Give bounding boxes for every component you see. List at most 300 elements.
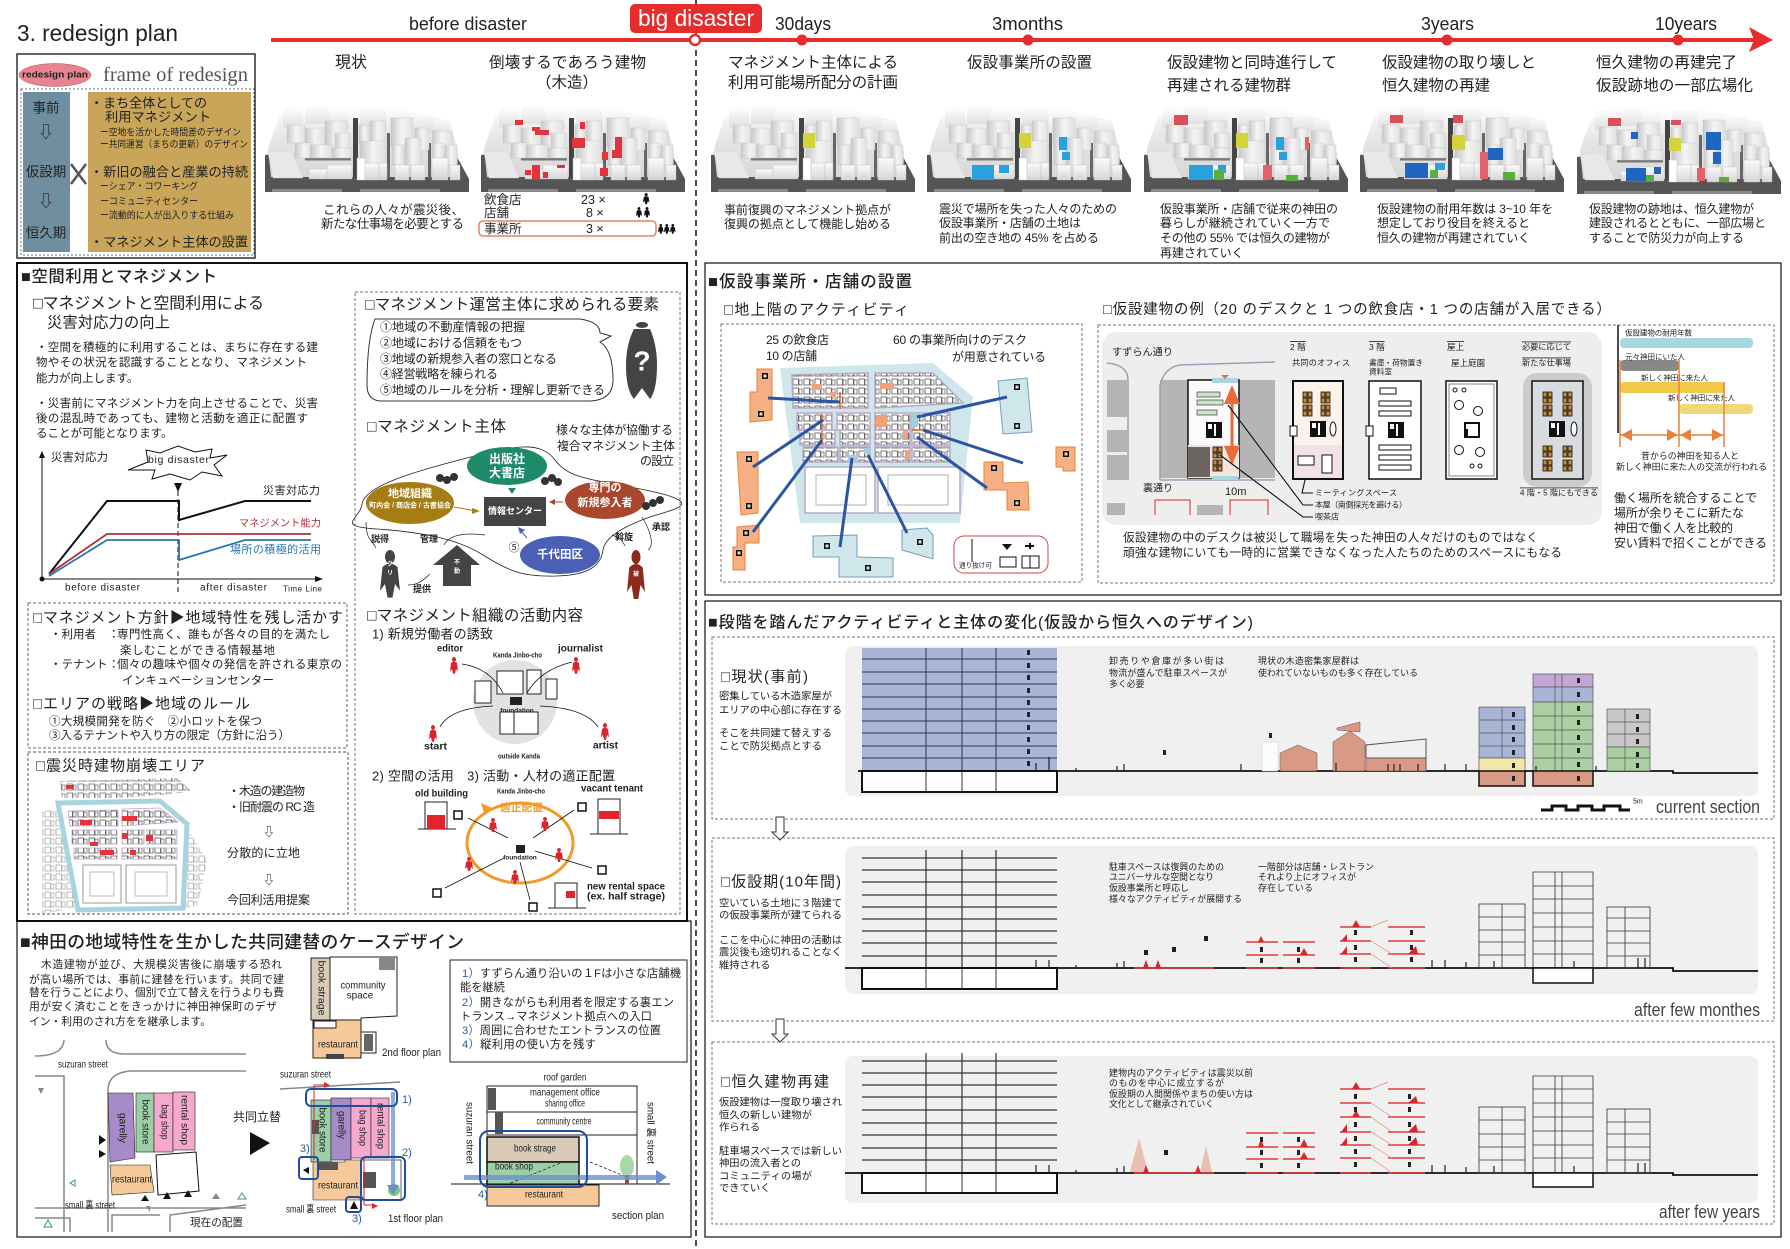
diagram: management body: 提供 — [413, 583, 431, 594]
diagram: attracting workers: journalist — [557, 644, 604, 654]
section: temporary: 仮設事業所と呼応し — [1109, 882, 1189, 893]
plan: 2F office — [1290, 342, 1350, 479]
disaster response text: 後の混乱時であっても、建物と活動を適正に配置す — [36, 411, 308, 425]
panel: frame of redesign: ー共同運営（まちの更新）のデザイン — [100, 138, 248, 150]
diagram: management body: 新規参入者 — [578, 495, 632, 509]
temporary building examples box: 20m — [1162, 421, 1183, 433]
heading: ■空間利用とマネジメント — [21, 268, 217, 286]
speech bubble: ⑤地域のルールを分析・理解し更新できる — [380, 383, 605, 397]
disaster response text: 災害対応力の向上 — [47, 314, 170, 332]
plan: present layout: small 裏 street — [65, 1198, 115, 1212]
management policy box: ・テナント — [50, 658, 108, 671]
3D city: 3 months — [927, 106, 1131, 192]
management policy box: □マネジメント方針▶地域特性を残し活かす — [33, 610, 343, 626]
plan: 1st floor: 3) — [300, 1143, 310, 1155]
diagram: management body: 承認 — [652, 521, 670, 532]
headings above 3D city panels: 倒壊するであろう建物 — [489, 54, 646, 72]
plan: present layout — [35, 1040, 246, 1232]
text: integrating workplaces: 働く場所を統合することで — [1614, 491, 1757, 505]
collapse area box — [28, 752, 348, 914]
plan: site: 本屋（南側採光を避ける） — [1315, 500, 1407, 510]
panel: frame of redesign: ・マネジメント主体の設置 — [90, 234, 248, 250]
section: temporary: 震災後も途切れることなく — [719, 946, 842, 958]
panel: space use and management — [17, 263, 687, 921]
management policy box: □エリアの戦略▶地域のルール — [33, 696, 250, 712]
panel: frame of redesign: ーコミュニティセンター — [100, 196, 198, 208]
texts below city panels: 建設されるとともに、一部広場と — [1589, 216, 1766, 230]
disaster response text: ・災害前にマネジメント力を向上させることで、災害 — [36, 396, 318, 410]
headings above 3D city panels: 仮設事業所の設置 — [967, 54, 1092, 72]
section: temporary: 空いている土地に３階建て — [719, 896, 842, 910]
management policy box: 楽しむことができる情報基地 — [120, 643, 276, 657]
temporary building examples box: 10m — [1225, 486, 1246, 498]
figure: creator: ク — [387, 560, 393, 568]
panel: frame of redesign: ⇩ — [38, 192, 54, 210]
section: permanent: コミュニティの場が — [719, 1170, 813, 1182]
diagram: management body: ⑤ — [508, 541, 520, 554]
diagram: attracting workers: outside Kanda — [498, 754, 540, 760]
section plan: restaurant — [525, 1190, 563, 1200]
section: temporary: それより上にオフィスが — [1258, 871, 1356, 882]
chart: temporary building lifespan — [1616, 325, 1767, 472]
disaster response text: ることが可能となります。 — [36, 426, 173, 440]
text: integrating workplaces: 神田で働く人を比較的 — [1614, 520, 1733, 535]
panel: case design of joint rebuilding — [17, 921, 691, 1237]
plan: present layout: 現在の配置 — [190, 1217, 243, 1229]
plan: 2nd floor: space — [347, 990, 374, 1002]
plan: rooftop garden: 屋上 — [1447, 342, 1465, 352]
diagram: management body: 説得 — [371, 533, 389, 544]
section: temporary: □仮設期(10年間) — [721, 874, 841, 890]
chart: disaster response capacity: 災害対応力 — [263, 484, 320, 497]
legend: 通り抜け可 — [959, 560, 992, 570]
panel: frame of redesign: ーシェア・コワーキング — [100, 180, 198, 192]
section plan: suzuran street — [464, 1102, 474, 1164]
ground floor activity box: が用意されている — [952, 349, 1046, 364]
headings above 3D city panels: 再建される建物群 — [1167, 76, 1291, 94]
text: explanation: 用が安く済むことをきっかけに神田神保町のデザ — [29, 999, 277, 1013]
collapse area box: ⇩ — [263, 873, 275, 887]
collapse area box: ⇩ — [263, 825, 275, 839]
plan: 2nd floor — [311, 957, 441, 1059]
ground floor activity box: 60 の事業所向けのデスク — [893, 332, 1027, 347]
plan: new workplaces: 4 階・5 階にもできる — [1520, 488, 1598, 498]
plan: 1st floor: 2) — [402, 1147, 412, 1159]
management policy box: ： — [108, 629, 120, 641]
chart: disaster response capacity: before disaster — [65, 582, 141, 594]
headings above 3D city panels: 仮設建物と同時進行して — [1167, 54, 1337, 72]
section: permanent: after few years — [1659, 1202, 1760, 1222]
section: permanent: 神田の流入者との — [719, 1156, 801, 1170]
table: damaged businesses: 23 × — [581, 193, 606, 207]
right column box: の設立 — [640, 454, 674, 468]
text: desks not only for: 頑強な建物にいても一時的に営業できなくなった人たちのためのスペースにもなる — [1123, 546, 1562, 560]
section plan: 4) — [478, 1189, 488, 1201]
section: permanent: 文化として継承されていく — [1109, 1098, 1214, 1109]
section: temporary: 一階部分は店舗・レストラン — [1258, 861, 1374, 872]
diagram: appropriate placement: Kanda Jinbo-cho — [497, 788, 545, 796]
section: current: 使われていないものも多く存在している — [1258, 667, 1418, 678]
right column box: □マネジメント運営主体に求められる要素 — [365, 296, 659, 314]
plan: 2nd floor: 2nd floor plan — [382, 1047, 441, 1059]
headings above 3D city panels — [335, 54, 1753, 94]
scale bar: 5m — [1633, 798, 1643, 806]
plan: 2F office: 2 階 — [1290, 342, 1306, 352]
diagram: attracting workers: foundation — [500, 708, 534, 714]
plan: present layout: garelly — [116, 1113, 128, 1143]
diagram: management body: 管理 — [420, 533, 438, 544]
section: temporary: 存在している — [1258, 882, 1313, 893]
3D city: 10 years — [1577, 108, 1781, 194]
plan: present layout: rental shop — [178, 1095, 190, 1145]
section: current: 現状の木造密集家屋群は — [1258, 655, 1359, 666]
plan: 2nd floor: community — [340, 980, 386, 992]
collapse area box: ・旧耐震の RC 造 — [228, 800, 315, 814]
section: current: □現状(事前) — [721, 668, 808, 686]
diagram: management body: 千代田区 — [537, 547, 583, 561]
section: temporary: ここを中心に神田の活動は — [719, 934, 842, 946]
chart: disaster response capacity — [39, 446, 323, 595]
chart: temporary building lifespan: 昔からの神田を知る人と — [1641, 450, 1739, 461]
plan: 1st floor: bag shop — [356, 1110, 368, 1146]
diagram: management body: 出版社 — [489, 451, 525, 466]
section: permanent: □恒久建物再建 — [721, 1074, 829, 1090]
texts below city panels — [724, 201, 1766, 260]
plan: site — [1107, 362, 1407, 522]
plan: 1st floor: 1st floor plan — [388, 1213, 443, 1225]
plan: site: 喫茶店 — [1315, 512, 1339, 522]
text box: design points: 3）周囲に合わせたエントランスの位置 — [462, 1024, 661, 1037]
section: temporary — [712, 838, 1774, 1021]
disaster response text: ・空間を積極的に利用することは、まちに存在する建 — [36, 340, 318, 354]
chart: disaster response capacity: 場所の積極的活用 — [230, 542, 321, 556]
table: damaged businesses: 8 × — [586, 206, 604, 220]
text: explanation — [29, 957, 284, 1028]
section: temporary: ユニバーサルな空間となり — [1109, 872, 1214, 882]
texts below city panels: 暮らしが継続されていく一方で — [1160, 215, 1330, 230]
headings above 3D city panels: （木造） — [536, 74, 598, 92]
section: current: ことで防災拠点とする — [719, 740, 822, 752]
icon: real-estate house: 不 — [454, 559, 460, 566]
chart: disaster response capacity: マネジメント能力 — [239, 516, 321, 530]
legend — [954, 536, 1048, 573]
texts below city panels: 前出の空き地の 45% を占める — [939, 230, 1099, 245]
section: permanent — [712, 1042, 1774, 1224]
section: temporary: after few monthes — [1634, 1000, 1760, 1020]
section: current: 物流が盛んで駐車スペースが — [1109, 667, 1227, 678]
text: integrating workplaces: 場所が余りそこに新たな — [1614, 505, 1744, 520]
icon: real-estate house: 動 — [454, 567, 460, 575]
plan: present layout: book store — [140, 1100, 150, 1145]
texts below city panels: その他の 55% では恒久の建物が — [1160, 230, 1330, 245]
section: temporary: の仮設事業所が建てられる — [719, 908, 842, 922]
disaster response text — [33, 294, 318, 440]
plan: new workplaces — [1520, 342, 1598, 498]
panel: temporary offices and shops: □仮設建物の例（20 のデスクと 1 つの飲食店・1 つの店舗が入居できる） — [1103, 300, 1611, 318]
plan: rooftop garden: 屋上庭園 — [1451, 358, 1485, 368]
texts below city panels: 恒久の建物が再建されていく — [1377, 230, 1530, 245]
texts below city panels: することで防災力が向上する — [1589, 230, 1744, 245]
arrow: to temporary phase — [772, 817, 788, 840]
heading: ■神田の地域特性を生かした共同建替のケースデザイン — [20, 931, 464, 952]
timeline arrow: before disaster — [409, 14, 527, 34]
plan: 3F storage: 資料室 — [1369, 366, 1392, 376]
right column box: 様々な主体が協働する — [556, 422, 673, 437]
texts below city panels: 仮設事業所・店舗の土地は — [939, 216, 1081, 230]
section plan: sharing office — [545, 1098, 585, 1110]
text box: design points: トランス→マネジメント拠点への入口 — [460, 1009, 652, 1023]
diagram: management body: 情報センター — [488, 505, 542, 516]
table: damaged businesses: 飲食店 — [484, 192, 522, 207]
plan: present layout: restaurant — [112, 1174, 152, 1186]
text: explanation: 木造建物が並び、大規模災害後に崩壊する恐れ — [41, 957, 282, 971]
diagram: appropriate placement: vacant tenant — [581, 784, 644, 794]
title: 3. redesign plan — [17, 20, 178, 46]
section plan — [451, 1072, 670, 1222]
figure: creator — [380, 550, 400, 598]
diagram: appropriate placement: (ex. half strage) — [587, 892, 665, 902]
management policy box: 専門性高く、誰もが各々の目的を満たし — [117, 627, 330, 641]
3D city: collapsing wooden buildings — [481, 106, 685, 192]
panel: frame of redesign: ー空地を活かした時間差のデザイン — [100, 126, 241, 138]
diagram: attracting workers: artist — [593, 740, 619, 752]
plan: site: ミーティングスペース — [1315, 488, 1397, 498]
panel: frame of redesign: 恒久期 — [26, 226, 66, 240]
timeline arrow: 3months — [992, 14, 1063, 34]
diagram: appropriate placement: 適正配置 — [500, 801, 544, 814]
plan: 1st floor: 1) — [402, 1094, 412, 1106]
diagram: management body: 町内会 / 商店会 / 古書協会 — [369, 500, 451, 510]
headings above 3D city panels: 仮設跡地の一部広場化 — [1596, 76, 1753, 94]
panel: frame of redesign: 利用マネジメント — [105, 110, 211, 124]
diagram: management body: 大書店 — [489, 465, 525, 480]
text: explanation: が高い場所では、事前に建替を行います。共同で建 — [29, 972, 284, 986]
blue link lines — [753, 397, 1023, 547]
section: current: エリアの中心部に存在する — [719, 704, 842, 716]
timeline arrow: 30days — [775, 14, 831, 34]
section: temporary: 駐車スペースは復興のための — [1109, 861, 1224, 872]
text box: design points — [450, 960, 687, 1062]
chart: temporary building lifespan: 仮設建物の耐用年数 — [1625, 328, 1692, 338]
texts below city panels: 仮設建物の耐用年数は 3~10 年を — [1377, 201, 1553, 216]
chart: temporary building lifespan: 新しく神田に来た人 — [1641, 372, 1708, 382]
collapse area box: 今回利活用提案 — [227, 892, 310, 907]
plan: 1st floor: book store — [316, 1108, 328, 1153]
section: current — [712, 637, 1774, 819]
plan: 3F storage: 書庫・荷物置き — [1369, 358, 1423, 368]
disaster response text: □マネジメントと空間利用による — [33, 294, 264, 312]
speech bubble: ①地域の不動産情報の把握 — [380, 320, 525, 334]
panel: temporary offices and shops — [705, 263, 1781, 595]
texts below city panels: 仮設建物の跡地は、恒久建物が — [1589, 201, 1754, 216]
headings above 3D city panels: 利用可能場所配分の計画 — [728, 74, 898, 92]
diagram: appropriate placement: old building — [415, 788, 468, 800]
section: current: そこを共同建て替えする — [719, 726, 832, 740]
plan: 3F storage — [1366, 342, 1423, 479]
section: permanent: 駐車場スペースでは新しい — [719, 1144, 842, 1158]
headings above 3D city panels: 恒久建物の再建完了 — [1596, 54, 1737, 72]
chart: temporary building lifespan: 新しく神田に来た人 — [1668, 392, 1736, 402]
big disaster label: big disaster — [638, 5, 754, 31]
right column box: 1) 新規労働者の誘致 — [372, 626, 493, 642]
figure: worker — [627, 550, 645, 599]
plan: present layout: suzuran street — [58, 1060, 108, 1070]
heading: ■仮設事業所・店舗の設置 — [708, 272, 912, 291]
plan: 2nd floor: book strage — [316, 960, 326, 1016]
disaster response text: 物やその状況を認識することとなり、マネジメント — [36, 355, 307, 369]
section: permanent: 仮設建物は一度取り壊され — [719, 1096, 843, 1108]
text box: design points: 4）縦利用の使い方を残す — [462, 1037, 596, 1051]
plan: new workplaces: 必要に応じて — [1522, 342, 1571, 352]
section plan: management office — [530, 1088, 600, 1098]
arrow: joint rebuilding — [233, 1110, 281, 1155]
texts below city panels: 想定しており役目を終えると — [1377, 215, 1530, 230]
management policy box — [28, 603, 347, 748]
plan: 1st floor: restaurant — [318, 1180, 358, 1192]
diagram: appropriate placement — [415, 784, 665, 911]
arrow: joint rebuilding: 共同立替 — [233, 1110, 281, 1124]
panel: frame of redesign: ・まち全体としての — [90, 96, 207, 110]
panel: frame of redesign: ・新旧の融合と産業の持続 — [90, 164, 248, 180]
panel: frame of redesign: 仮設期 — [26, 164, 66, 180]
section plan: book strage — [514, 1144, 556, 1154]
plan: 2nd floor: restaurant — [318, 1040, 358, 1050]
3D city: 3 years — [1360, 106, 1564, 192]
speech bubble: ④経営戦略を練られる — [380, 366, 498, 381]
ground floor activity box: 10 の店舗 — [766, 349, 817, 363]
management policy box: 個々の趣味や個々の発信を許される東京の — [117, 657, 342, 671]
text: people need new workplaces: これらの人々が震災後、 — [323, 202, 464, 217]
section: temporary: 維持される — [719, 958, 770, 972]
disaster response text: 能力が向上します。 — [36, 371, 138, 385]
text box: design points: 2）開きながらも利用者を限定する裏エン — [462, 995, 674, 1009]
text: integrating workplaces — [1614, 491, 1767, 550]
figure: creator: リ — [387, 571, 393, 577]
panel: staged activity change — [705, 601, 1781, 1237]
table: damaged businesses: 3 × — [586, 222, 604, 236]
section: permanent: 恒久の新しい建物が — [719, 1108, 813, 1122]
plan: 1st floor: rental shop — [374, 1103, 386, 1149]
text: desks not only for: 仮設建物の中のデスクは被災して職場を失った神田の人々だけのものではなく — [1123, 530, 1538, 544]
section: permanent: できていく — [719, 1182, 770, 1194]
section: current: current section — [1656, 797, 1760, 817]
icon: real-estate house — [433, 545, 480, 586]
text: desks not only for — [1123, 530, 1562, 560]
texts below city panels: 再建されていく — [1160, 246, 1244, 260]
panel: frame of redesign: redesign plan — [22, 70, 88, 80]
plan: present layout: bag shop — [158, 1104, 170, 1140]
plan: new workplaces: 新たな仕事場 — [1522, 358, 1571, 368]
section: permanent: 建物内のアクティビティは震災以前 — [1109, 1067, 1253, 1078]
right column box: 2) 空間の活用 3) 活動・人材の適正配置 — [372, 768, 615, 784]
speech bubble: ②地域における信頼をもつ — [380, 336, 522, 350]
text: explanation: 替を行うことにより、個別で立て替えを行うよりも費 — [29, 985, 284, 999]
headings above 3D city panels: 恒久建物の再建 — [1382, 76, 1490, 94]
table: damaged businesses: 事業所 — [484, 221, 522, 236]
section plan: community centre — [536, 1116, 592, 1128]
right column box: □マネジメント主体 — [367, 418, 506, 436]
section plan: section plan — [612, 1210, 664, 1222]
chart: disaster response capacity: Time Line — [283, 584, 323, 594]
diagram: management body: 斡旋 — [615, 531, 633, 542]
dashed divider — [695, 0, 697, 1249]
text: people need new workplaces — [321, 202, 464, 231]
management policy box: インキュベーションセンター — [122, 674, 274, 687]
diagram: management body: 専門の — [588, 480, 622, 494]
panel: frame of redesign — [17, 54, 255, 258]
big disaster label — [630, 4, 762, 45]
map: ground floor — [780, 363, 973, 523]
section: current: 卸売りや倉庫が多い街は — [1109, 655, 1224, 666]
3D city: 30 days — [711, 106, 915, 192]
section: temporary: 様々なアクティビティが展開する — [1109, 893, 1242, 904]
text: people need new workplaces: 新たな仕事場を必要とする — [321, 217, 464, 231]
plan: 2F office: 共同のオフィス — [1292, 358, 1350, 368]
diagram: attracting workers: editor — [437, 644, 463, 654]
timeline arrow: 3years — [1421, 14, 1474, 34]
panel: frame of redesign: ⇩ — [38, 124, 54, 142]
plan: 1st floor: 3) — [352, 1213, 362, 1225]
speech bubble — [367, 319, 613, 401]
headings above 3D city panels: マネジメント主体による — [728, 54, 898, 72]
section plan: book shop — [495, 1162, 533, 1172]
panel: temporary offices and shops: □地上階のアクティビティ — [724, 302, 909, 318]
diagram: management body: 地域組織 — [388, 486, 432, 500]
table: damaged businesses: 店舗 — [484, 206, 509, 220]
plan: 1st floor — [280, 1070, 443, 1225]
text: explanation: イン・利用のされ方をを継承します。 — [29, 1014, 211, 1028]
timeline arrow — [271, 14, 1773, 52]
section: current: 多く必要 — [1109, 678, 1145, 689]
ground floor activity box: 25 の飲食店 — [766, 332, 829, 347]
arrow: to permanent phase — [772, 1019, 788, 1042]
icon: question figure: ? — [633, 346, 651, 376]
panel: frame of redesign: 事前 — [32, 100, 60, 116]
collapse area box: □震災時建物崩壊エリア — [36, 758, 205, 774]
texts below city panels: 事前復興のマネジメント拠点が — [724, 202, 891, 217]
heading: ■段階を踏んだアクティビティと主体の変化(仮設から恒久へのデザイン) — [708, 612, 1253, 632]
chart: temporary building lifespan: 元々神田にいた人 — [1625, 352, 1686, 362]
timeline arrow: 10years — [1655, 14, 1717, 34]
texts below city panels: 震災で場所を失った人々のための — [939, 201, 1117, 216]
section: permanent: 作られる — [719, 1122, 760, 1134]
plan: 1st floor: garelly — [336, 1111, 346, 1139]
collapse area box: ・木造の建造物 — [228, 784, 305, 798]
diagram: appropriate placement: foundation — [503, 854, 537, 862]
diagram: management body — [352, 447, 682, 599]
diagram: attracting workers: Kanda Jinbo-cho — [493, 652, 542, 660]
table: damaged businesses — [479, 192, 676, 236]
plan: 3F storage: 3 階 — [1369, 342, 1385, 352]
temporary building examples box — [1098, 325, 1774, 583]
plan: 1st floor: suzuran street — [280, 1070, 331, 1080]
scale bar — [1541, 798, 1643, 810]
chart: temporary building lifespan: 新しく神田に来た人の交流が行われる — [1616, 461, 1767, 472]
diagram: attracting workers: start — [424, 742, 448, 752]
right column box — [352, 292, 682, 914]
panel: frame of redesign: ー流動的に人が出入りする仕組み — [100, 210, 234, 222]
3D city: 5 stages rebuild — [1144, 106, 1348, 192]
headings above 3D city panels: 現状 — [335, 54, 367, 72]
section plan: roof garden — [544, 1072, 586, 1084]
section: permanent: のものを中心に成立するが — [1109, 1077, 1224, 1088]
headings above 3D city panels: 仮設建物の取り壊しと — [1382, 54, 1536, 72]
text: integrating workplaces: 安い賃料で招くことができる — [1614, 535, 1767, 550]
text box: design points: 1）すずらん通り沿いの１Fは小さな店舗機 — [462, 966, 681, 980]
section: permanent: 仮設期の人間関係やまちの使い方は — [1109, 1088, 1253, 1099]
management policy box: ①大規模開発を防ぐ ②小ロットを保つ — [49, 714, 262, 728]
temporary sites: orange and blue — [733, 369, 1075, 577]
